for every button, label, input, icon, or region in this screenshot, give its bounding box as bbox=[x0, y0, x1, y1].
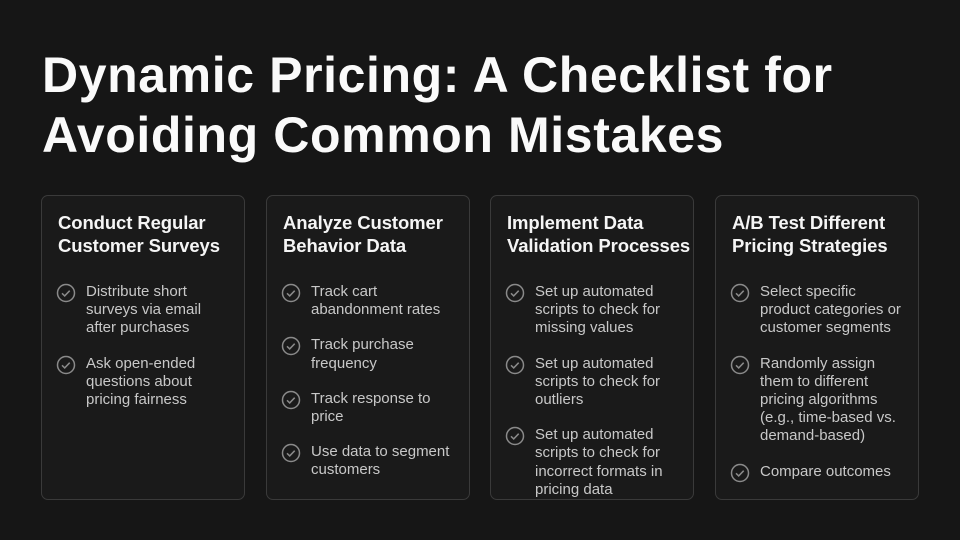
items: outliers bbox=[535, 391, 583, 408]
title: Dynamic Pricing: A Checklist for bbox=[42, 47, 833, 103]
items: after purchases bbox=[86, 319, 189, 336]
items: pricing algorithms bbox=[760, 391, 878, 408]
items: customers bbox=[311, 461, 380, 478]
items: Randomly assign bbox=[760, 355, 875, 372]
items: product categories or bbox=[760, 301, 901, 318]
heading: Implement Data bbox=[507, 212, 643, 233]
heading: Behavior Data bbox=[283, 235, 406, 256]
items: pricing data bbox=[535, 481, 613, 498]
heading bbox=[732, 212, 888, 256]
items: Select specific bbox=[760, 283, 856, 300]
items: Set up automated bbox=[535, 355, 653, 372]
items: incorrect formats in bbox=[535, 463, 663, 480]
items bbox=[506, 283, 663, 498]
heading bbox=[283, 212, 443, 256]
heading: A/B Test Different bbox=[732, 212, 885, 233]
items: Distribute short bbox=[86, 283, 187, 300]
items: them to different bbox=[760, 373, 868, 390]
items: Compare outcomes bbox=[760, 463, 891, 480]
items: price bbox=[311, 408, 344, 425]
heading bbox=[58, 212, 220, 256]
title: Avoiding Common Mistakes bbox=[42, 107, 724, 163]
heading: Pricing Strategies bbox=[732, 235, 888, 256]
items: Track response to bbox=[311, 390, 430, 407]
items: Track purchase bbox=[311, 336, 414, 353]
items: Set up automated bbox=[535, 283, 653, 300]
heading: Analyze Customer bbox=[283, 212, 443, 233]
items: scripts to check for bbox=[535, 373, 660, 390]
items: frequency bbox=[311, 355, 377, 372]
panel: surveys bbox=[41, 195, 245, 500]
heading: Validation Processes bbox=[507, 235, 690, 256]
items: pricing fairness bbox=[86, 391, 187, 408]
items: Ask open-ended bbox=[86, 355, 195, 372]
panel: A/B test bbox=[715, 195, 919, 500]
heading bbox=[507, 212, 690, 256]
items: scripts to check for bbox=[535, 301, 660, 318]
items: (e.g., time-based vs. bbox=[760, 409, 896, 426]
items: customer segments bbox=[760, 319, 891, 336]
items: abandonment rates bbox=[311, 301, 440, 318]
title bbox=[42, 47, 833, 163]
items: Track cart bbox=[311, 283, 377, 300]
items: missing values bbox=[535, 319, 633, 336]
items: Use data to segment bbox=[311, 443, 449, 460]
items bbox=[282, 283, 450, 478]
items: surveys via email bbox=[86, 301, 201, 318]
items: scripts to check for bbox=[535, 444, 660, 461]
panel: validation bbox=[490, 195, 694, 500]
heading: Conduct Regular bbox=[58, 212, 206, 233]
items bbox=[730, 283, 901, 482]
items: questions about bbox=[86, 373, 192, 390]
items: demand-based) bbox=[760, 427, 865, 444]
panel: behavior data bbox=[266, 195, 470, 500]
items bbox=[56, 283, 201, 408]
items: Set up automated bbox=[535, 426, 653, 443]
heading: Customer Surveys bbox=[58, 235, 220, 256]
